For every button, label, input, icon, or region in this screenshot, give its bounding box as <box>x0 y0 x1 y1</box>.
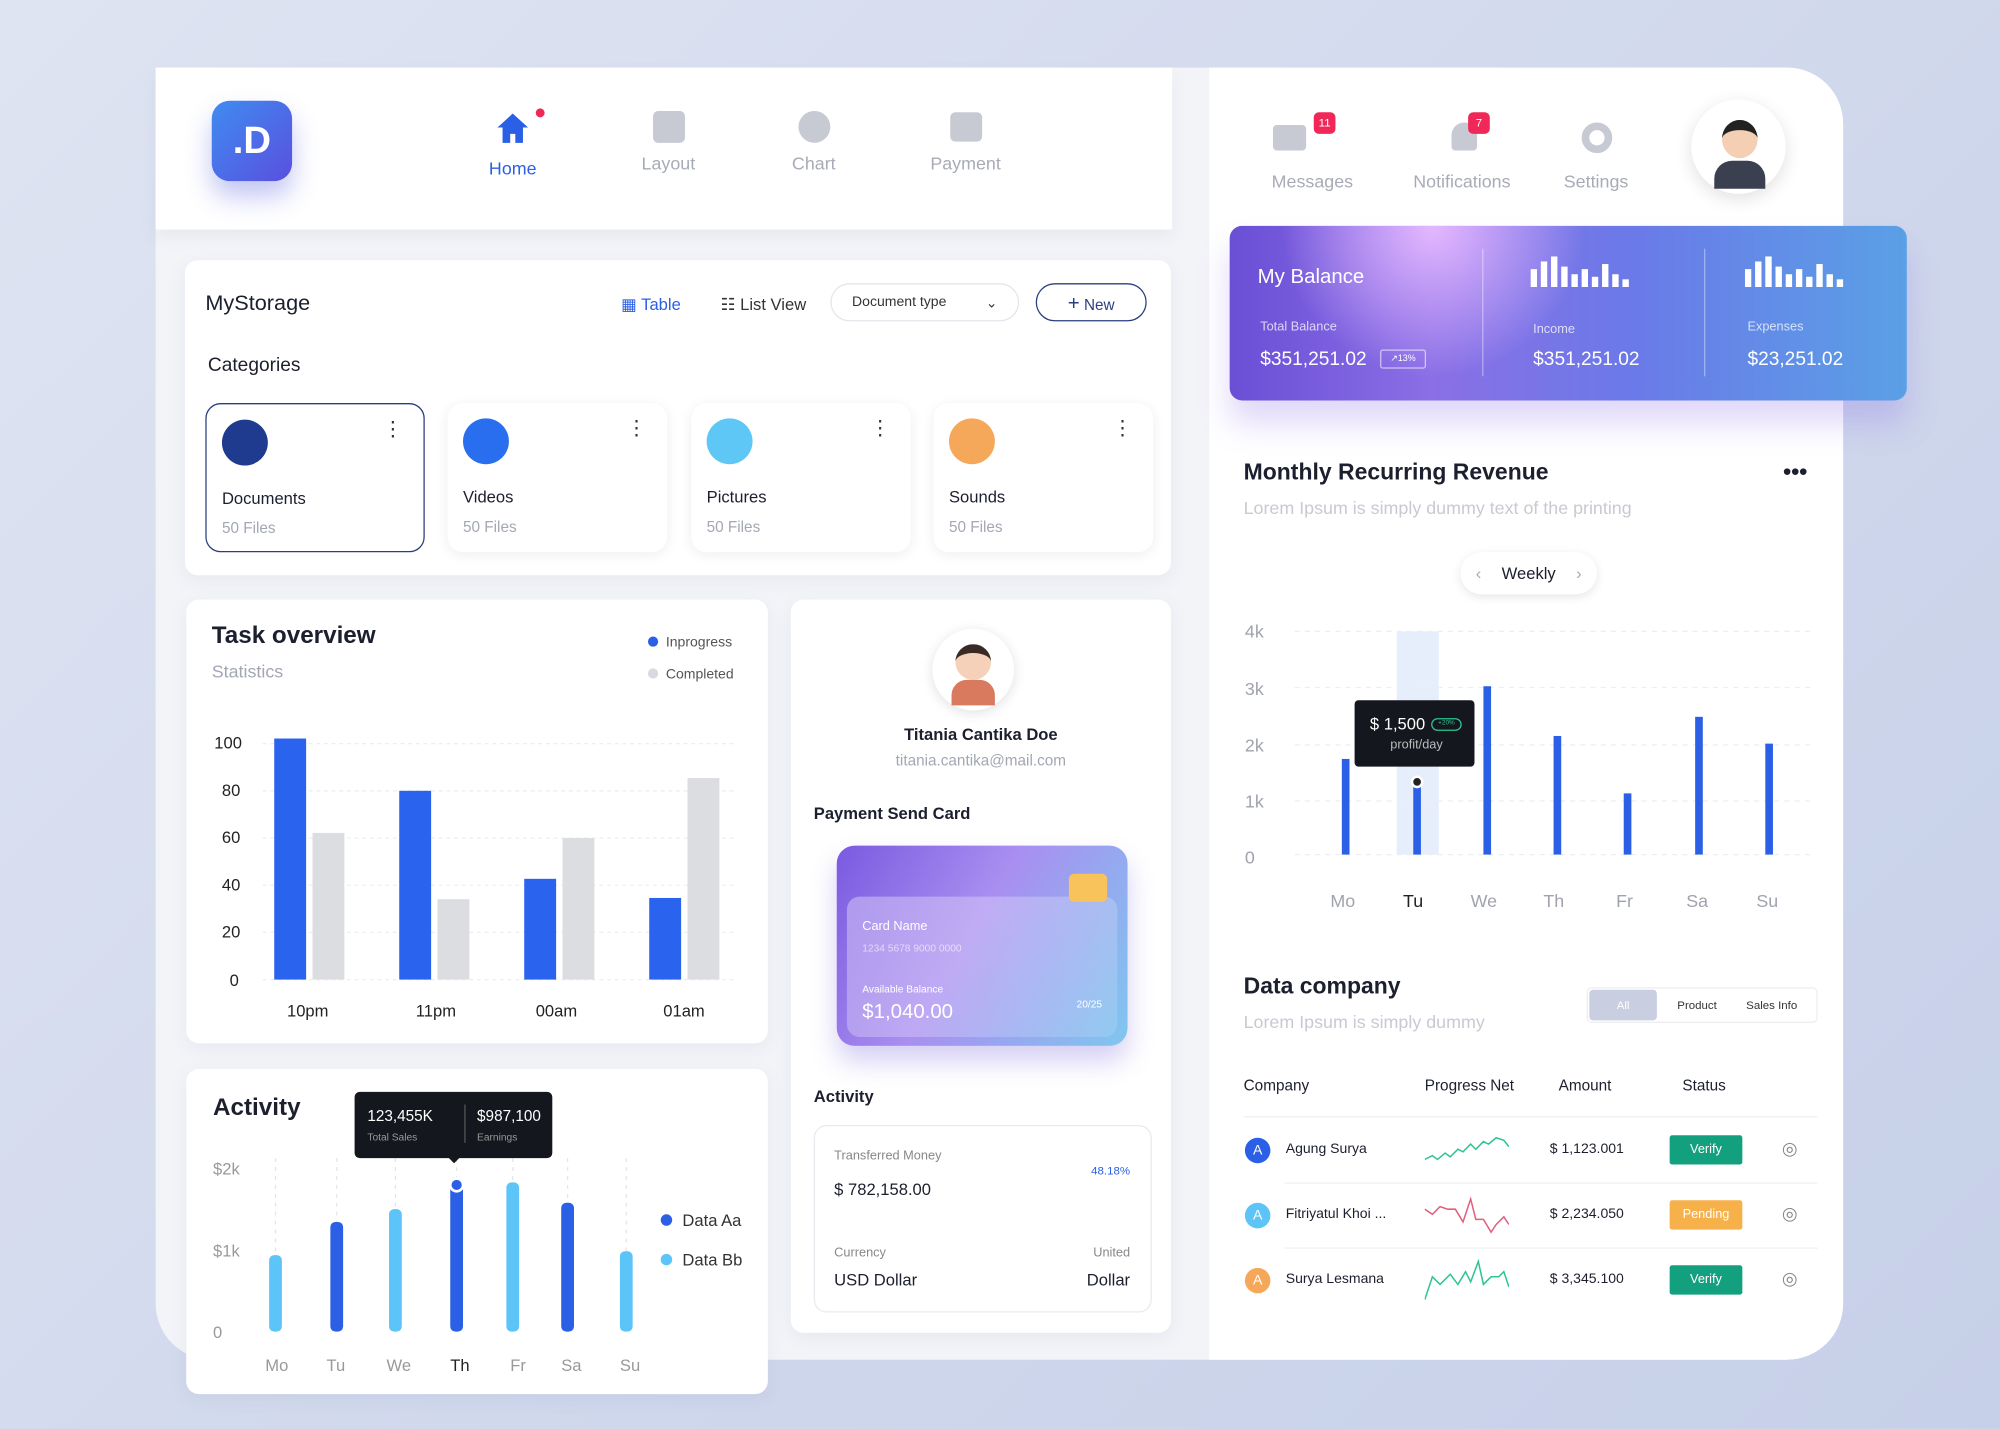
header icons: messages/notifications/settings: Settings <box>1564 171 1628 191</box>
category: Videos: ⋮ <box>626 418 647 440</box>
panel: profile & payment card: Payment Send Card <box>814 804 970 823</box>
revenue chart: Th <box>1543 891 1564 911</box>
row 3 <box>1244 1259 1797 1300</box>
row 1: $ 1,123.001 <box>1550 1142 1624 1157</box>
balance card: Expenses <box>1747 320 1803 334</box>
bar chart: 00am <box>536 1002 577 1021</box>
row 1: Verify <box>1690 1143 1722 1157</box>
row 2: ◎ <box>1782 1203 1797 1223</box>
tabs <box>1587 987 1818 1023</box>
activity chart: $2k <box>213 1160 240 1179</box>
data table: Progress Net <box>1425 1077 1514 1094</box>
payment card: Available Balance <box>862 983 943 995</box>
nav: Layout: Layout <box>642 153 695 173</box>
avatar: user <box>1691 99 1786 194</box>
weekly selector: ‹ <box>1476 564 1481 583</box>
revenue chart: Su <box>1756 891 1778 911</box>
nav: Chart <box>792 111 836 173</box>
revenue tooltip: $ 1,500 <box>1370 714 1425 733</box>
weekly selector <box>1460 552 1597 594</box>
nav: Home: Home <box>489 158 537 179</box>
tooltip: 123,455K <box>367 1107 433 1125</box>
bar chart: 60 <box>222 828 240 847</box>
row 1: Agung Surya <box>1286 1142 1367 1157</box>
activity chart: Th <box>450 1356 470 1375</box>
balance card: Total Balance <box>1260 320 1337 334</box>
category: Documents: ⋮ <box>383 420 403 441</box>
row 2: A <box>1253 1208 1262 1223</box>
toolbar: ▦ Table <box>621 295 681 314</box>
header icons: messages/notifications/settings: Notifications <box>1413 171 1511 191</box>
activity chart: Tu <box>327 1356 345 1375</box>
balance card: Income <box>1533 323 1575 337</box>
toolbar: ⌄ <box>986 296 997 311</box>
main background card <box>156 68 1843 1360</box>
tooltip <box>355 1092 552 1158</box>
bar chart: 01am <box>663 1002 705 1021</box>
tabs: All <box>1617 999 1629 1011</box>
legend <box>648 635 734 682</box>
toolbar: Document type <box>852 295 946 310</box>
revenue chart: Fr <box>1616 891 1633 911</box>
tooltip: $987,100 <box>477 1107 541 1125</box>
activity chart <box>213 1158 640 1375</box>
transfer box: Transferred Money <box>834 1149 941 1163</box>
row 1 <box>1244 1135 1797 1164</box>
heading: categories: Categories <box>208 355 300 376</box>
heading: monthly recurring revenue: Monthly Recurring Revenue <box>1244 459 1549 485</box>
panel: activity <box>186 1069 768 1394</box>
legend: Inprogress <box>666 635 732 651</box>
revenue chart: Tu <box>1403 891 1423 911</box>
row 3: A <box>1253 1273 1262 1288</box>
activity chart: Mo <box>265 1356 288 1375</box>
toolbar <box>621 283 1147 322</box>
panel: profile & payment card: Titania Cantika Doe <box>904 724 1058 744</box>
activity chart: Sa <box>561 1356 582 1375</box>
avatar <box>932 629 1014 710</box>
tooltip: Earnings <box>477 1131 517 1143</box>
row 1: A <box>1253 1143 1262 1158</box>
header icons: messages/notifications/settings: Messages <box>1272 171 1353 191</box>
transfer box: Currency <box>834 1246 886 1260</box>
data table: Amount <box>1559 1077 1611 1094</box>
data table: Status <box>1682 1077 1726 1094</box>
category: Pictures: 50 Files <box>707 518 760 536</box>
heading: MyStorage <box>205 291 310 315</box>
logo <box>212 101 292 181</box>
bar chart: 80 <box>222 781 240 800</box>
panel: task overview: Statistics <box>212 661 283 681</box>
bar chart: 11pm <box>416 1002 456 1021</box>
revenue chart: We <box>1471 891 1497 911</box>
row 3: ◎ <box>1782 1268 1797 1288</box>
revenue chart: 3k <box>1245 679 1264 699</box>
balance card <box>1230 226 1907 401</box>
nav: Chart: Chart <box>792 153 836 173</box>
heading: data company: Data company <box>1244 973 1401 999</box>
panel: task overview: Task overview <box>212 622 376 649</box>
row 2: Fitriyatul Khoi ... <box>1286 1207 1386 1222</box>
category: Videos <box>448 403 667 552</box>
category: Sounds: 50 Files <box>949 518 1003 536</box>
logo: .D <box>233 120 271 162</box>
header icons: messages/notifications/settings: 7 <box>1476 116 1482 129</box>
category: Documents: Documents <box>222 489 306 508</box>
activity chart: 0 <box>213 1323 222 1342</box>
bar chart: 10pm <box>287 1002 328 1021</box>
transfer box <box>814 1125 1152 1312</box>
row 3: Surya Lesmana <box>1286 1272 1384 1287</box>
revenue chart: 0 <box>1245 848 1255 868</box>
top nav bar <box>156 68 1172 230</box>
activity chart: We <box>386 1356 411 1375</box>
balance card: $23,251.02 <box>1747 348 1843 370</box>
transfer box: Dollar <box>1087 1270 1130 1290</box>
text: Lorem Ipsum is simply dummy text of the printing <box>1244 497 1632 518</box>
data table <box>1244 1077 1818 1300</box>
revenue chart: Sa <box>1686 891 1708 911</box>
category: Pictures: Pictures <box>707 487 767 506</box>
bar chart: 40 <box>222 875 240 894</box>
revenue chart: 2k <box>1245 735 1264 755</box>
transfer box: 48.18% <box>1091 1165 1130 1177</box>
bar chart <box>214 734 734 1021</box>
tabs: Sales Info <box>1746 999 1797 1011</box>
row 2: Pending <box>1683 1208 1729 1222</box>
payment card: $1,040.00 <box>862 1001 953 1023</box>
panel: activity: Activity <box>213 1094 301 1121</box>
header icons: messages/notifications/settings <box>1272 112 1628 191</box>
payment card: 1234 5678 9000 0000 <box>862 943 962 954</box>
text: Lorem Ipsum is simply dummy <box>1244 1011 1485 1032</box>
activity chart: Fr <box>510 1356 526 1375</box>
legend: Data Aa <box>682 1210 741 1230</box>
category: Videos: 50 Files <box>463 518 517 536</box>
category: Pictures <box>691 403 911 552</box>
panel: profile & payment card: Activity <box>814 1087 874 1106</box>
tooltip: Total Sales <box>367 1131 417 1143</box>
panel: profile & payment card <box>791 599 1171 1333</box>
nav: Payment <box>930 112 1001 173</box>
revenue chart <box>1245 622 1810 911</box>
legend: Data Bb <box>682 1250 742 1269</box>
category: Sounds: Sounds <box>949 487 1005 506</box>
transfer box: $ 782,158.00 <box>834 1180 931 1199</box>
weekly selector: › <box>1576 564 1582 583</box>
balance card: $351,251.02 <box>1260 348 1367 370</box>
payment card: Card Name <box>862 920 927 934</box>
revenue chart: 1k <box>1245 791 1264 811</box>
revenue chart: 4k <box>1245 622 1264 642</box>
category: Videos: Videos <box>463 487 513 506</box>
balance card: $351,251.02 <box>1533 348 1640 370</box>
row 3: $ 3,345.100 <box>1550 1272 1624 1287</box>
transfer box: USD Dollar <box>834 1270 917 1290</box>
category: Documents <box>205 403 425 552</box>
revenue tooltip <box>1355 700 1474 767</box>
bar chart: 100 <box>214 734 242 753</box>
nav: Layout <box>642 111 696 173</box>
balance card: ↗13% <box>1390 355 1416 364</box>
payment card: 20/25 <box>1077 999 1102 1010</box>
bar chart: 20 <box>222 922 240 941</box>
tabs: Product <box>1677 999 1717 1011</box>
legend <box>660 1210 742 1269</box>
nav: Payment: Payment <box>930 153 1001 173</box>
text: ••• <box>1783 459 1807 485</box>
activity chart: Su <box>620 1356 640 1375</box>
category: Documents: 50 Files <box>222 519 276 537</box>
toolbar: + New <box>1068 293 1115 315</box>
category: Pictures: ⋮ <box>870 418 890 440</box>
nav: Home <box>489 108 545 179</box>
weekly selector: Weekly <box>1502 564 1556 583</box>
panel: profile & payment card: titania.cantika@mail.com <box>896 751 1066 769</box>
activity chart: $1k <box>213 1241 240 1260</box>
revenue tooltip: +20% <box>1438 719 1455 727</box>
income mini bars <box>1530 256 1629 287</box>
row 3: Verify <box>1690 1273 1722 1287</box>
toolbar: ☷ List View <box>721 295 806 314</box>
right white panel <box>1209 68 1843 1360</box>
row 2 <box>1244 1196 1797 1234</box>
data table: Company <box>1244 1077 1309 1094</box>
revenue chart: Mo <box>1330 891 1355 911</box>
row 2: $ 2,234.050 <box>1550 1207 1624 1222</box>
bar chart: 0 <box>230 971 239 990</box>
transfer box: United <box>1093 1246 1130 1260</box>
legend: Completed <box>666 667 734 682</box>
category: Sounds <box>934 403 1153 552</box>
balance card: My Balance <box>1258 267 1364 288</box>
header icons: messages/notifications/settings: 11 <box>1319 116 1331 129</box>
row 1: ◎ <box>1782 1138 1797 1158</box>
panel: task overview <box>186 599 768 1043</box>
panel: MyStorage <box>185 260 1171 575</box>
revenue tooltip: profit/day <box>1390 739 1443 753</box>
payment card <box>837 846 1128 1046</box>
category: Sounds: ⋮ <box>1112 418 1133 440</box>
